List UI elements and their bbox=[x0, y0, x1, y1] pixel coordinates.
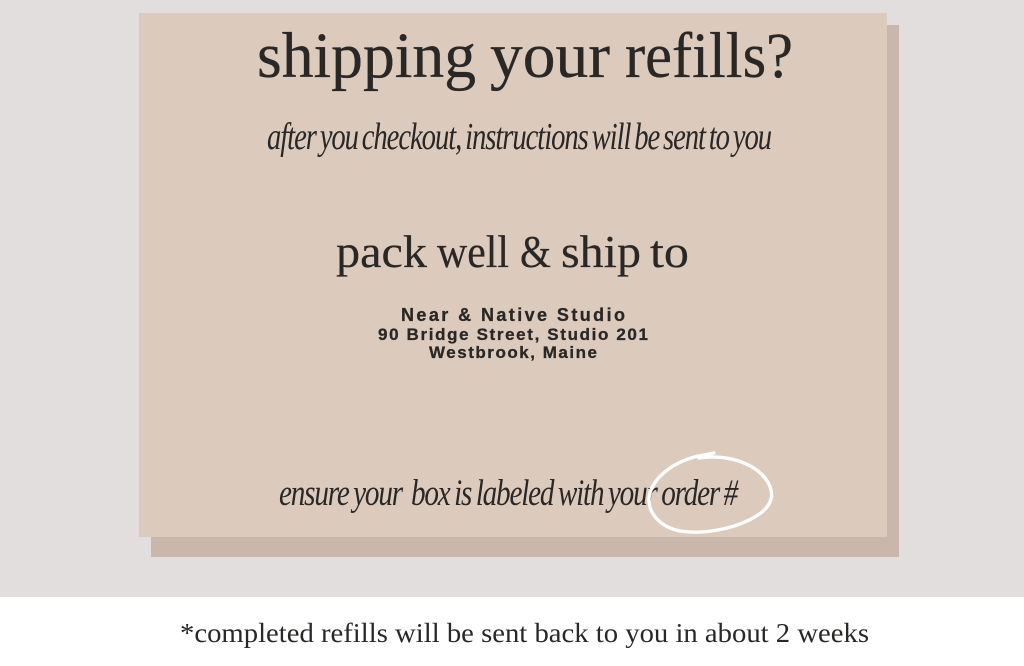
heading: pack well bbox=[336, 226, 689, 277]
heading: pack well: well bbox=[437, 226, 509, 277]
address block: 90 Bridge Street, Studio 201 bbox=[378, 325, 648, 344]
title: refills? bbox=[625, 20, 793, 92]
panel: shipping card bbox=[139, 13, 887, 537]
card shadow bbox=[151, 25, 899, 557]
address block bbox=[378, 305, 648, 362]
label instruction: ensure your box is labeled with your order # bbox=[279, 473, 739, 514]
icon: hand-drawn circle around order number bbox=[649, 453, 772, 532]
heading: pack well: & bbox=[520, 226, 551, 277]
footnote: *completed refills will be sent back to you in about 2 weeks bbox=[180, 618, 869, 648]
heading: pack well: ship bbox=[561, 226, 641, 277]
subtitle: after you checkout, instructions will be sent to you bbox=[267, 116, 771, 158]
title: your bbox=[490, 20, 610, 92]
heading: pack well: pack bbox=[336, 226, 427, 277]
title bbox=[257, 20, 793, 92]
address block: Westbrook, Maine bbox=[429, 343, 597, 362]
heading: pack well: to bbox=[650, 226, 689, 277]
title: shipping bbox=[257, 20, 476, 92]
address block: Near & Native Studio bbox=[401, 305, 625, 325]
